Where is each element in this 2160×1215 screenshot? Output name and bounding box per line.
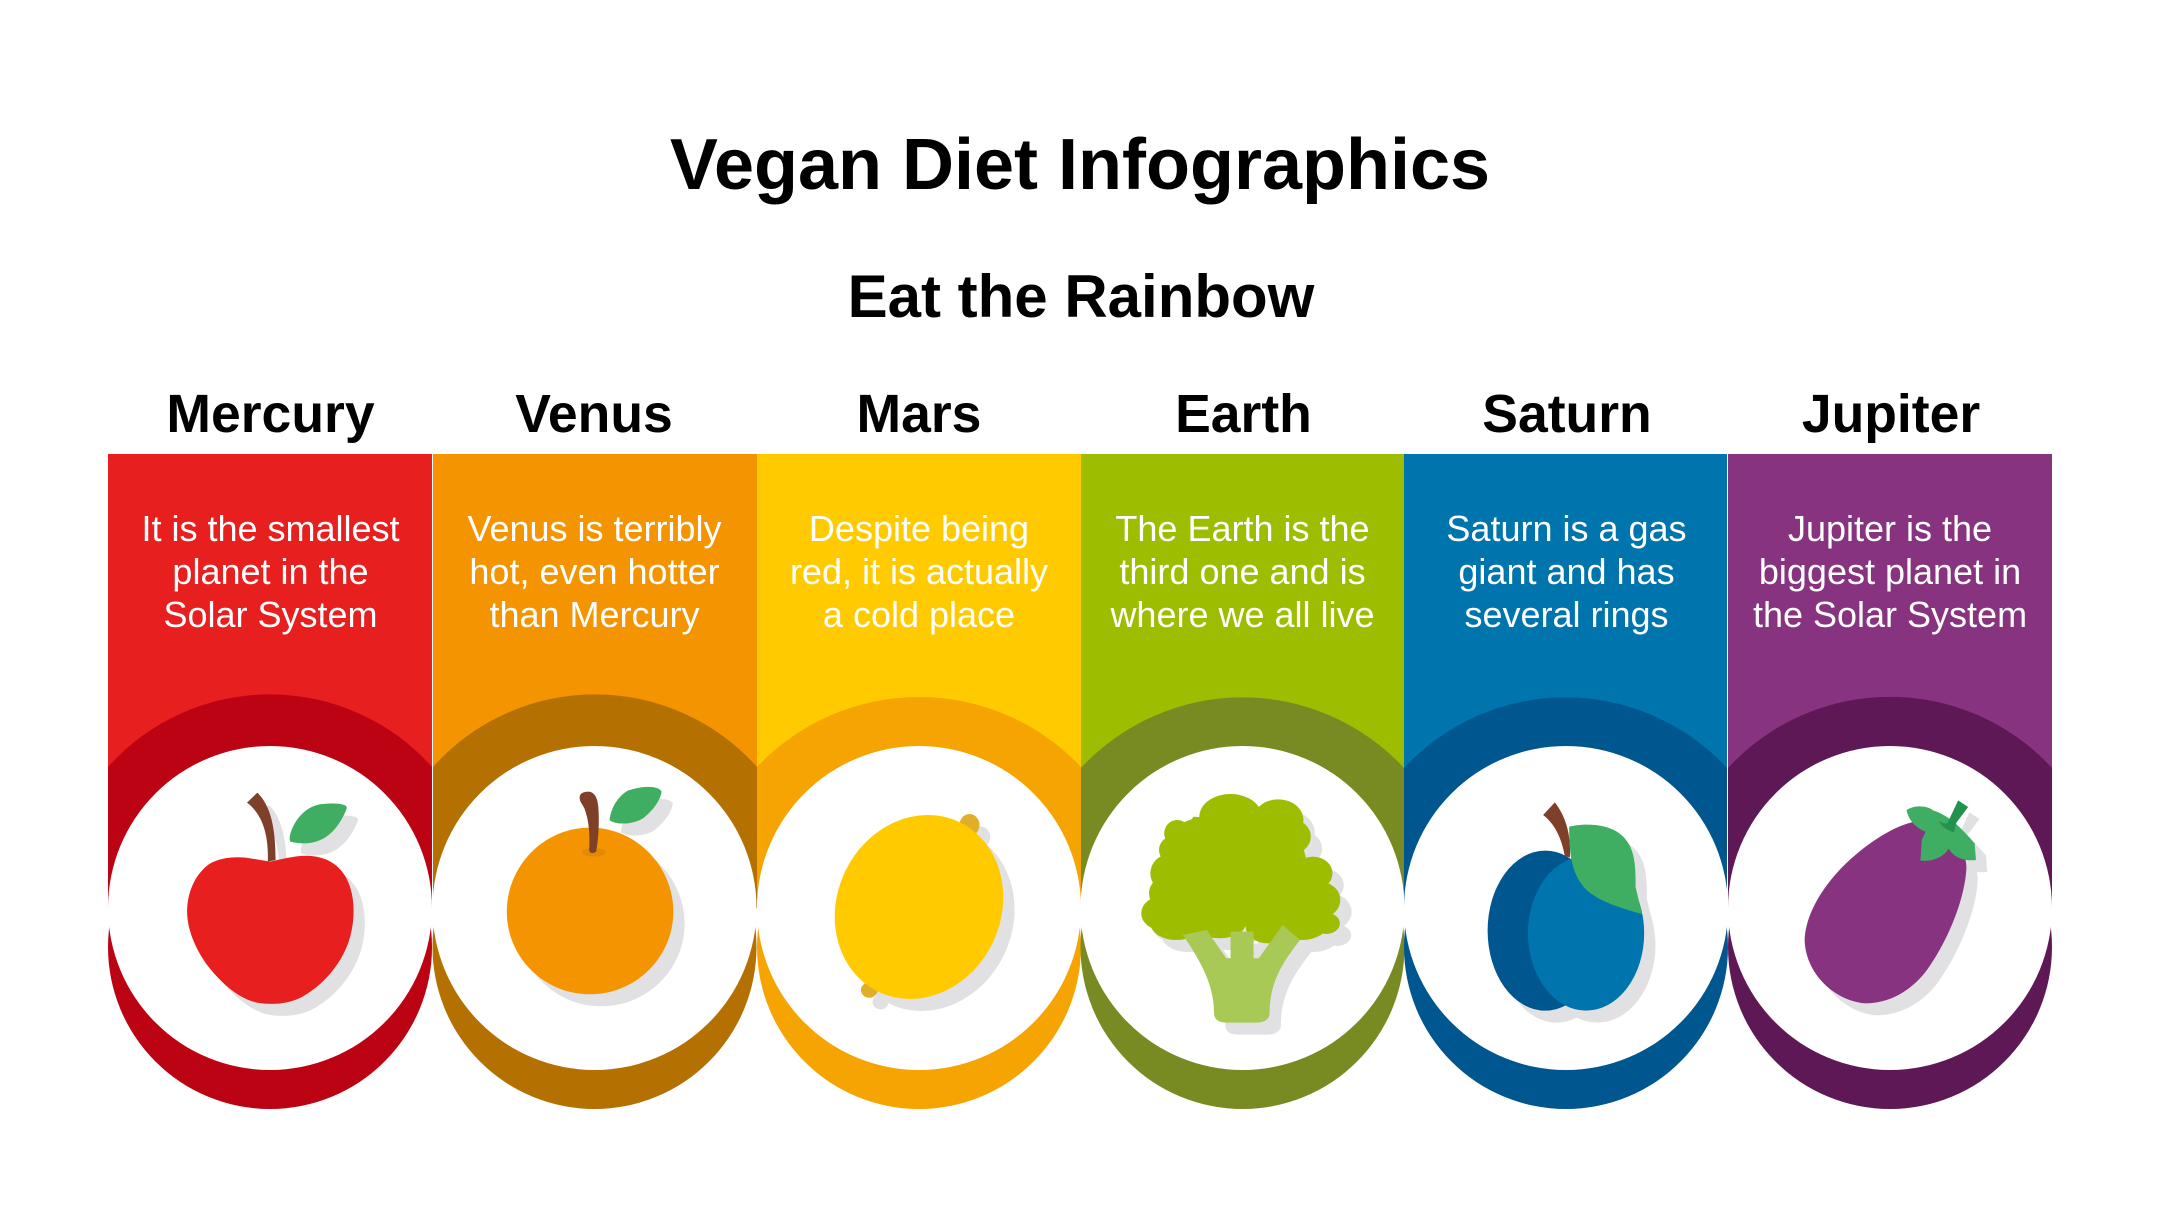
panel: Saturn	[1404, 385, 1728, 1109]
lower crescent	[432, 785, 756, 1109]
heading: Jupiter: Jupiter	[1802, 385, 1980, 444]
description	[141, 508, 400, 635]
white plate	[757, 746, 1081, 1070]
description: several rings	[1464, 594, 1669, 635]
panel background	[433, 454, 757, 834]
description: red, it is actually	[790, 551, 1048, 592]
icon: broccoli	[1141, 794, 1352, 1035]
description: hot, even hotter	[469, 551, 720, 592]
white plate	[1080, 746, 1404, 1070]
description: Despite being	[809, 508, 1029, 549]
description	[1109, 508, 1375, 635]
panel background	[108, 454, 432, 834]
upper arc	[1404, 697, 1727, 908]
lower crescent	[1404, 785, 1728, 1109]
description	[1446, 508, 1687, 635]
panel: Mars	[757, 385, 1081, 1109]
description: giant and has	[1458, 551, 1675, 592]
description: than Mercury	[489, 594, 700, 635]
panel background	[1728, 454, 2052, 834]
panel: Jupiter	[1728, 385, 2052, 1109]
white plate	[108, 746, 432, 1070]
title: Vegan Diet Infographics	[670, 125, 1490, 205]
panel: Mercury	[108, 385, 432, 1109]
heading: Saturn: Saturn	[1482, 385, 1652, 444]
description: Saturn is a gas	[1446, 508, 1687, 549]
lower crescent	[1728, 785, 2052, 1109]
description: It is the smallest	[141, 508, 400, 549]
description: where we all live	[1109, 594, 1375, 635]
description: Solar System	[163, 594, 378, 635]
white plate	[1404, 746, 1728, 1070]
lower crescent	[108, 785, 432, 1109]
icon: plum	[1488, 802, 1655, 1023]
description: Jupiter is the	[1788, 508, 1992, 549]
white plate	[432, 746, 756, 1070]
icon: lemon	[805, 787, 1044, 1039]
description: third one and is	[1119, 551, 1366, 592]
heading: Earth: Earth	[1175, 385, 1312, 444]
description: The Earth is the	[1115, 508, 1370, 549]
upper arc	[433, 694, 757, 908]
heading: Mars: Mars	[857, 385, 981, 444]
description	[1753, 508, 2027, 635]
heading: Mercury: Mercury	[166, 385, 375, 444]
description: Venus is terribly	[467, 508, 722, 549]
lower crescent	[1080, 785, 1404, 1109]
panel background	[1081, 454, 1404, 834]
panel background	[757, 454, 1081, 834]
description	[790, 508, 1048, 635]
panel: Earth	[1080, 385, 1404, 1109]
white plate	[1728, 746, 2052, 1070]
icon: eggplant	[1805, 800, 1987, 1015]
upper arc	[108, 694, 432, 908]
description: biggest planet in	[1759, 551, 2021, 592]
description: the Solar System	[1753, 594, 2027, 635]
lower crescent	[757, 785, 1081, 1109]
panel background	[1404, 454, 1727, 834]
heading: Venus: Venus	[515, 385, 673, 444]
icon: apple	[187, 793, 365, 1016]
upper arc	[1081, 697, 1404, 908]
panel: Venus	[432, 385, 757, 1109]
subtitle: Eat the Rainbow	[848, 263, 1315, 330]
upper arc	[1728, 697, 2052, 908]
description: a cold place	[823, 594, 1015, 635]
icon: orange	[507, 787, 685, 1006]
upper arc	[757, 697, 1081, 908]
description: planet in the	[172, 551, 369, 592]
description	[467, 508, 722, 635]
